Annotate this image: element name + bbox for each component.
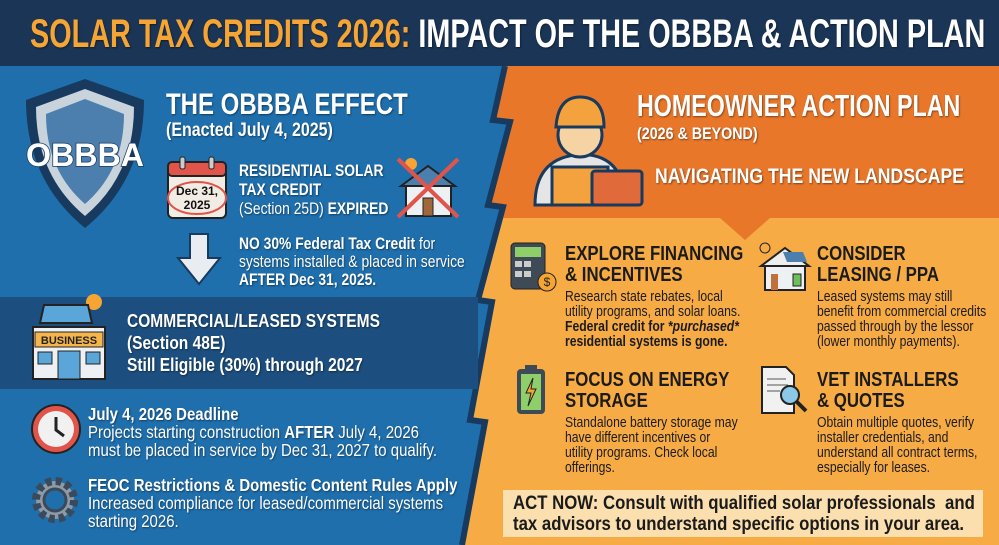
heading: homeowner action plan: (2026 & BEYOND) bbox=[637, 124, 758, 143]
text: FEOC: Increased compliance for leased/commercial systems bbox=[88, 493, 443, 513]
item: energy storage: utility programs. Check local bbox=[565, 445, 717, 461]
text: commercial/leased: (Section 48E) bbox=[127, 332, 225, 353]
heading: homeowner action plan: HOMEOWNER ACTION PLAN bbox=[637, 88, 960, 123]
icon: OBBBA shield: OBBBA bbox=[26, 137, 144, 173]
item: vet installers: installer credentials, and bbox=[817, 430, 948, 446]
heading: the OBBBA effect bbox=[166, 88, 410, 142]
text: commercial/leased: COMMERCIAL/LEASED SYSTEMS bbox=[127, 310, 380, 331]
item: vet installers: understand all contract terms, bbox=[817, 445, 977, 461]
callout: act now: tax advisors to understand specific options in your area. bbox=[513, 513, 964, 535]
item: vet installers: especially for leases. bbox=[817, 460, 930, 476]
item: leasing: passed through by the lessor bbox=[817, 319, 973, 335]
text: residential credit expired bbox=[239, 162, 390, 219]
text: no 30% credit: systems installed & placed in service bbox=[239, 253, 465, 271]
icon: document with magnifier bbox=[761, 366, 808, 414]
icon: calendar bbox=[167, 156, 227, 219]
icon: calculator: $ bbox=[544, 275, 551, 289]
item: energy storage: Standalone battery storage may bbox=[565, 415, 738, 431]
item: vet installers: Obtain multiple quotes, verify bbox=[817, 415, 974, 431]
item: leasing: Leased systems may still bbox=[817, 289, 952, 305]
text: July 4 deadline bbox=[88, 404, 438, 462]
item: vet installers: VET INSTALLERS bbox=[817, 369, 959, 391]
icon: worker bbox=[534, 96, 644, 206]
item: financing: Federal credit for *purchased* bbox=[565, 319, 739, 335]
text: no 30% credit bbox=[239, 235, 466, 289]
item: leasing: (lower monthly payments). bbox=[817, 334, 960, 350]
callout: act now: ACT NOW: Consult with qualified solar professionals and bbox=[513, 492, 975, 514]
callout: act now bbox=[503, 490, 983, 537]
item: financing: Research state rebates, local bbox=[565, 289, 723, 305]
text: commercial/leased bbox=[127, 310, 381, 377]
item: energy storage: have different incentives or bbox=[565, 430, 710, 446]
icon: battery bbox=[517, 365, 545, 414]
item: energy storage bbox=[517, 365, 738, 476]
item: leasing: benefit from commercial credits bbox=[817, 304, 986, 320]
item: energy storage: STORAGE bbox=[565, 390, 648, 412]
icon: clock bbox=[31, 404, 81, 454]
item: financing: EXPLORE FINANCING bbox=[565, 243, 743, 265]
text: no 30% credit: NO 30% Federal Tax Credit for bbox=[239, 235, 435, 253]
text: July 4 deadline: July 4, 2026 Deadline bbox=[88, 404, 239, 424]
icon: crossed house bbox=[396, 158, 460, 218]
text: FEOC bbox=[88, 475, 459, 532]
item: leasing: CONSIDER bbox=[817, 243, 906, 265]
item: financing: utility programs, and solar loans. bbox=[565, 304, 740, 320]
arrow: down bbox=[176, 233, 222, 286]
item: leasing bbox=[758, 242, 986, 350]
item: energy storage: FOCUS ON ENERGY bbox=[565, 369, 729, 391]
title bar: SOLAR TAX CREDITS 2026: IMPACT OF THE OBBBA & ACTION PLAN bbox=[30, 12, 985, 56]
icon: house with panels bbox=[758, 242, 812, 291]
subheading: navigating: NAVIGATING THE NEW LANDSCAPE bbox=[655, 165, 964, 188]
icon: business: BUSINESS bbox=[41, 335, 97, 347]
item: financing: residential systems is gone. bbox=[565, 334, 727, 350]
icon: calendar: 2025 bbox=[184, 198, 211, 212]
icon: business bbox=[32, 294, 106, 380]
text: residential credit expired: TAX CREDIT bbox=[239, 181, 321, 199]
heading: homeowner action plan bbox=[637, 88, 960, 144]
item: financing: & INCENTIVES bbox=[565, 264, 683, 286]
text: FEOC: starting 2026. bbox=[88, 511, 179, 531]
item: vet installers: & QUOTES bbox=[817, 390, 905, 412]
text: commercial/leased: Still Eligible (30%) through 2027 bbox=[127, 354, 363, 375]
text: no 30% credit: AFTER Dec 31, 2025. bbox=[239, 271, 376, 289]
text: July 4 deadline: must be placed in service by Dec 31, 2027 to qualify. bbox=[88, 440, 437, 460]
icon: calendar: Dec 31, bbox=[176, 184, 218, 198]
icon: gear bbox=[32, 477, 78, 523]
icon: calculator bbox=[510, 242, 556, 292]
item: vet installers bbox=[761, 366, 977, 476]
text: residential credit expired: (Section 25D) EXPIRED bbox=[239, 200, 388, 218]
icon: OBBBA shield bbox=[26, 79, 144, 228]
text: FEOC: FEOC Restrictions & Domestic Content Rules Apply bbox=[88, 475, 457, 495]
item: leasing: LEASING / PPA bbox=[817, 264, 939, 286]
text: residential credit expired: RESIDENTIAL SOLAR bbox=[239, 162, 384, 180]
title bar bbox=[0, 0, 999, 66]
item: financing bbox=[510, 242, 743, 350]
text: July 4 deadline: Projects starting construction AFTER July 4, 2026 bbox=[88, 422, 419, 442]
item: energy storage: offerings. bbox=[565, 460, 615, 476]
heading: the OBBBA effect: (Enacted July 4, 2025) bbox=[166, 120, 333, 141]
heading: the OBBBA effect: THE OBBBA EFFECT bbox=[166, 88, 408, 121]
